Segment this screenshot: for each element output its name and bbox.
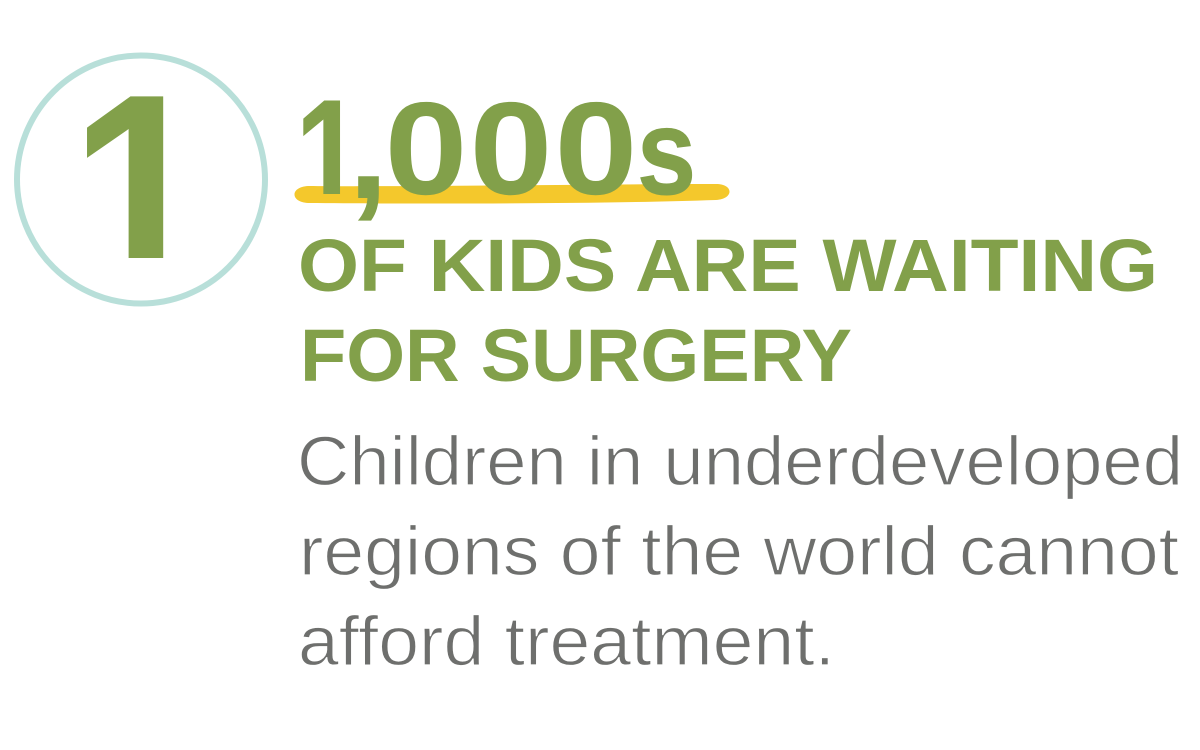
yellow highlighter stroke xyxy=(294,184,730,204)
badge numeral: 1 xyxy=(70,37,210,349)
headline number: s xyxy=(637,84,696,221)
headline text xyxy=(298,224,1158,397)
body text xyxy=(297,422,1183,680)
badge circle xyxy=(17,56,265,304)
body line 2: regions of the world cannot xyxy=(299,512,1179,590)
infographic canvas xyxy=(14,52,1178,666)
headline number: 000 xyxy=(385,75,637,222)
body line 1: Children in underdeveloped xyxy=(297,422,1183,500)
numbered badge xyxy=(14,52,268,306)
headline number: , xyxy=(348,66,389,229)
headline line 2: FOR SURGERY xyxy=(300,314,852,397)
headline number: 1 xyxy=(295,66,363,247)
headline number xyxy=(303,100,692,221)
body line 3: afford treatment. xyxy=(298,602,835,680)
headline line 1: OF KIDS ARE WAITING xyxy=(298,224,1158,307)
